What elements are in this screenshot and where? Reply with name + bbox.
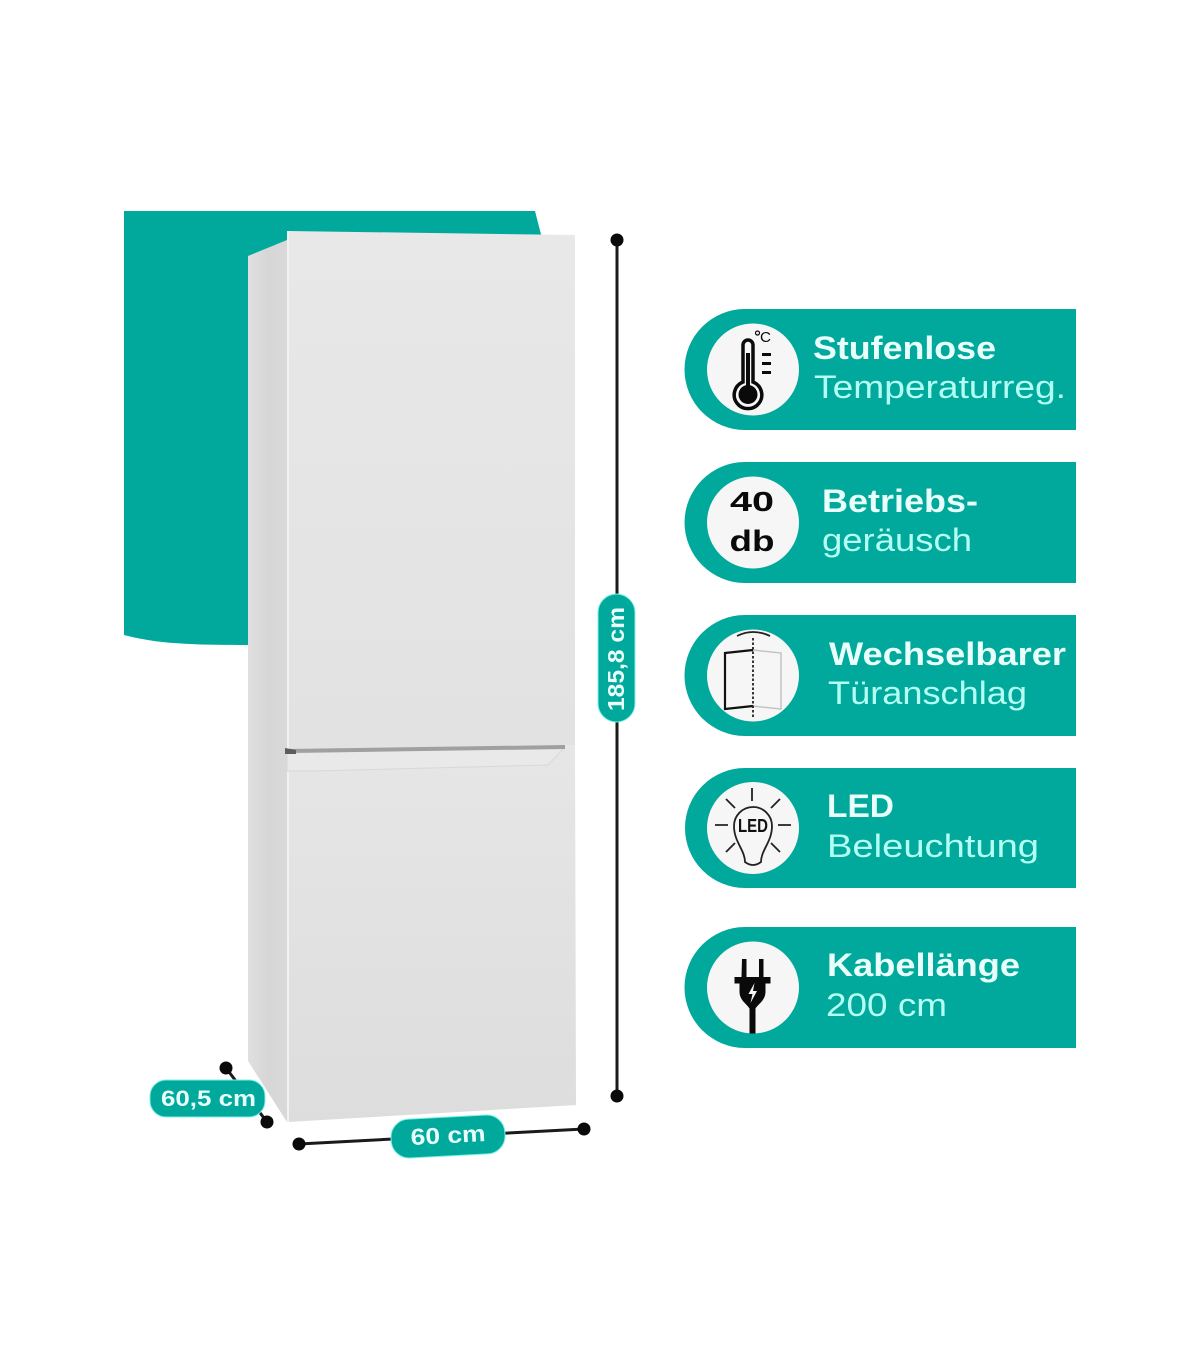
- depth label: 60,5 cm: [161, 1086, 256, 1111]
- depth end dot bottom: [260, 1116, 274, 1128]
- feature: LED: [685, 768, 1076, 888]
- refrigerator: [248, 231, 576, 1122]
- hinge end: [285, 748, 296, 754]
- width dimension: [292, 1114, 590, 1159]
- icon circle: [707, 476, 799, 568]
- title: Wechselbarer: [829, 636, 1066, 672]
- icon circle: [707, 324, 799, 416]
- pill background: [685, 462, 1076, 583]
- pill background: [684, 309, 1076, 430]
- teal background shape: [124, 211, 545, 645]
- pill background: [684, 615, 1076, 736]
- depth dimension: [150, 1062, 274, 1128]
- icon: LED bulb: [715, 788, 791, 865]
- width label: 60 cm: [410, 1120, 486, 1150]
- depth line: [226, 1068, 267, 1122]
- width end dot right: [578, 1122, 590, 1136]
- height dimension: [598, 234, 635, 1102]
- subtitle: Türanschlag: [828, 675, 1027, 711]
- icon: plug: [734, 959, 770, 1034]
- door gap line: [286, 745, 565, 753]
- upper door: [287, 231, 575, 752]
- height pill: [598, 594, 635, 722]
- pill background: [684, 927, 1076, 1048]
- width pill: [390, 1114, 506, 1159]
- title: Stufenlose: [813, 330, 996, 366]
- pill background: [685, 768, 1076, 888]
- height end dot bottom: [610, 1090, 624, 1102]
- width line: [299, 1129, 584, 1144]
- icon: thermometer: C: [760, 329, 771, 346]
- icon: 40 db: db: [730, 525, 774, 558]
- icon circle: [707, 782, 799, 874]
- icon: door: [725, 632, 781, 718]
- feature: door hinge: [684, 615, 1076, 736]
- icon: 40 db: [730, 486, 774, 558]
- depth end dot top: [220, 1062, 232, 1074]
- subtitle: Temperaturreg.: [814, 369, 1066, 405]
- icon circle: [707, 630, 799, 722]
- height label: 185,8 cm: [603, 607, 629, 711]
- subtitle: geräusch: [822, 522, 972, 558]
- feature: noise: [685, 462, 1076, 583]
- feature: temperature: [684, 309, 1076, 430]
- icon: 40 db: 40: [730, 486, 774, 517]
- feature: cable: [684, 927, 1076, 1048]
- title: LED: [827, 788, 894, 824]
- title: Betriebs-: [822, 483, 978, 519]
- icon circle: [707, 942, 799, 1034]
- subtitle: Beleuchtung: [827, 828, 1039, 864]
- title: Kabellänge: [827, 947, 1020, 983]
- height line: [616, 240, 618, 1096]
- lower door: [287, 745, 576, 1122]
- height end dot top: [610, 234, 624, 246]
- subtitle: 200 cm: [826, 987, 947, 1023]
- door edge highlight: [287, 231, 289, 1122]
- handle recess: [287, 747, 565, 771]
- fridge side panel: [248, 240, 287, 1122]
- icon: LED bulb: LED: [738, 816, 768, 836]
- icon: thermometer: [734, 329, 771, 409]
- width end dot left: [292, 1138, 306, 1150]
- depth pill: [150, 1080, 265, 1117]
